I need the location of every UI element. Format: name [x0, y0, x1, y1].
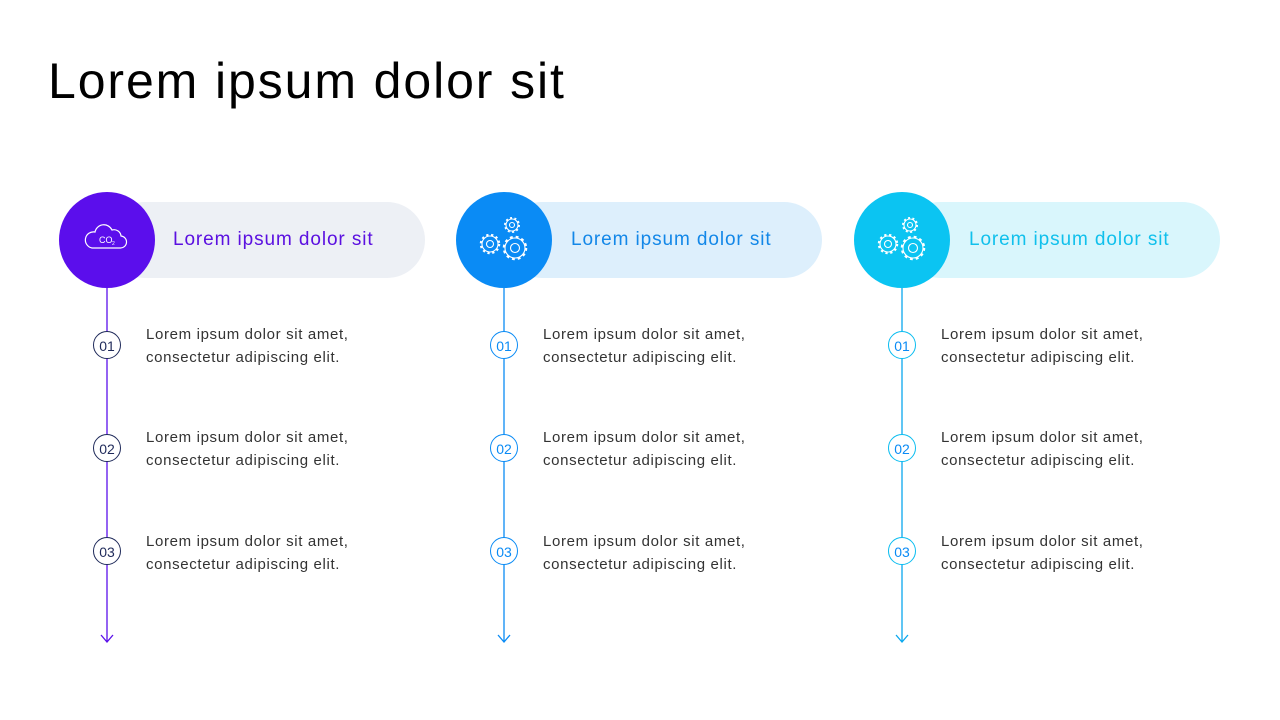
icon circle: gears [456, 192, 552, 288]
panel: column 3: consectetur adipiscing elit. [941, 349, 1135, 366]
panel: column 3 [854, 192, 1220, 643]
title: Lorem ipsum dolor sit [48, 53, 566, 109]
step 03: 03 [894, 544, 910, 560]
timeline line 1 [100, 288, 114, 643]
pill 3 [902, 202, 1220, 278]
step 01: 01 [894, 338, 910, 354]
step 01: 01 [496, 338, 512, 354]
step 02: 02 [99, 441, 115, 457]
step 03 [888, 537, 916, 565]
panel: column 3: consectetur adipiscing elit. [941, 556, 1135, 573]
icon circle: CO2 [59, 192, 155, 288]
pill 2 [504, 202, 822, 278]
step 02: 02 [496, 441, 512, 457]
pill 1 [107, 202, 425, 278]
panel: column 1: Lorem ipsum dolor sit amet, [146, 326, 349, 343]
step 01 [93, 331, 121, 359]
panel: column 2: consectetur adipiscing elit. [543, 556, 737, 573]
step 01: 01 [99, 338, 115, 354]
panel: column 2: Lorem ipsum dolor sit amet, [543, 429, 746, 446]
icon circle: CO2: CO [99, 235, 112, 245]
icon circle: CO2: 2 [112, 241, 115, 247]
step 02 [888, 434, 916, 462]
panel: column 1: Lorem ipsum dolor sit amet, [146, 533, 349, 550]
panel: column 2 [456, 192, 822, 643]
step 03: 03 [496, 544, 512, 560]
panel: column 1: consectetur adipiscing elit. [146, 349, 340, 366]
timeline line 2 [498, 288, 510, 643]
panel: column 3: Lorem ipsum dolor sit amet, [941, 533, 1144, 550]
panel: column 2: Lorem ipsum dolor sit amet, [543, 326, 746, 343]
panel: column 3: consectetur adipiscing elit. [941, 452, 1135, 469]
step 01 [490, 331, 518, 359]
step 02 [93, 434, 121, 462]
step 03: 03 [99, 544, 115, 560]
icon circle: gears [854, 192, 950, 288]
panel: column 1: Lorem ipsum dolor sit amet, [146, 429, 349, 446]
step 02: 02 [894, 441, 910, 457]
step 01 [888, 331, 916, 359]
pill heading 1: Lorem ipsum dolor sit [173, 229, 374, 250]
panel: column 1 [59, 192, 425, 643]
step 02 [490, 434, 518, 462]
panel: column 1: consectetur adipiscing elit. [146, 556, 340, 573]
panel: column 2: consectetur adipiscing elit. [543, 349, 737, 366]
panel: column 3: Lorem ipsum dolor sit amet, [941, 429, 1144, 446]
panel: column 1: consectetur adipiscing elit. [146, 452, 340, 469]
step 03 [93, 537, 121, 565]
pill heading 2: Lorem ipsum dolor sit [571, 229, 772, 250]
step 03 [490, 537, 518, 565]
timeline line 3 [896, 288, 908, 643]
panel: column 3: Lorem ipsum dolor sit amet, [941, 326, 1144, 343]
panel: column 2: Lorem ipsum dolor sit amet, [543, 533, 746, 550]
pill heading 3: Lorem ipsum dolor sit [969, 229, 1170, 250]
panel: column 2: consectetur adipiscing elit. [543, 452, 737, 469]
